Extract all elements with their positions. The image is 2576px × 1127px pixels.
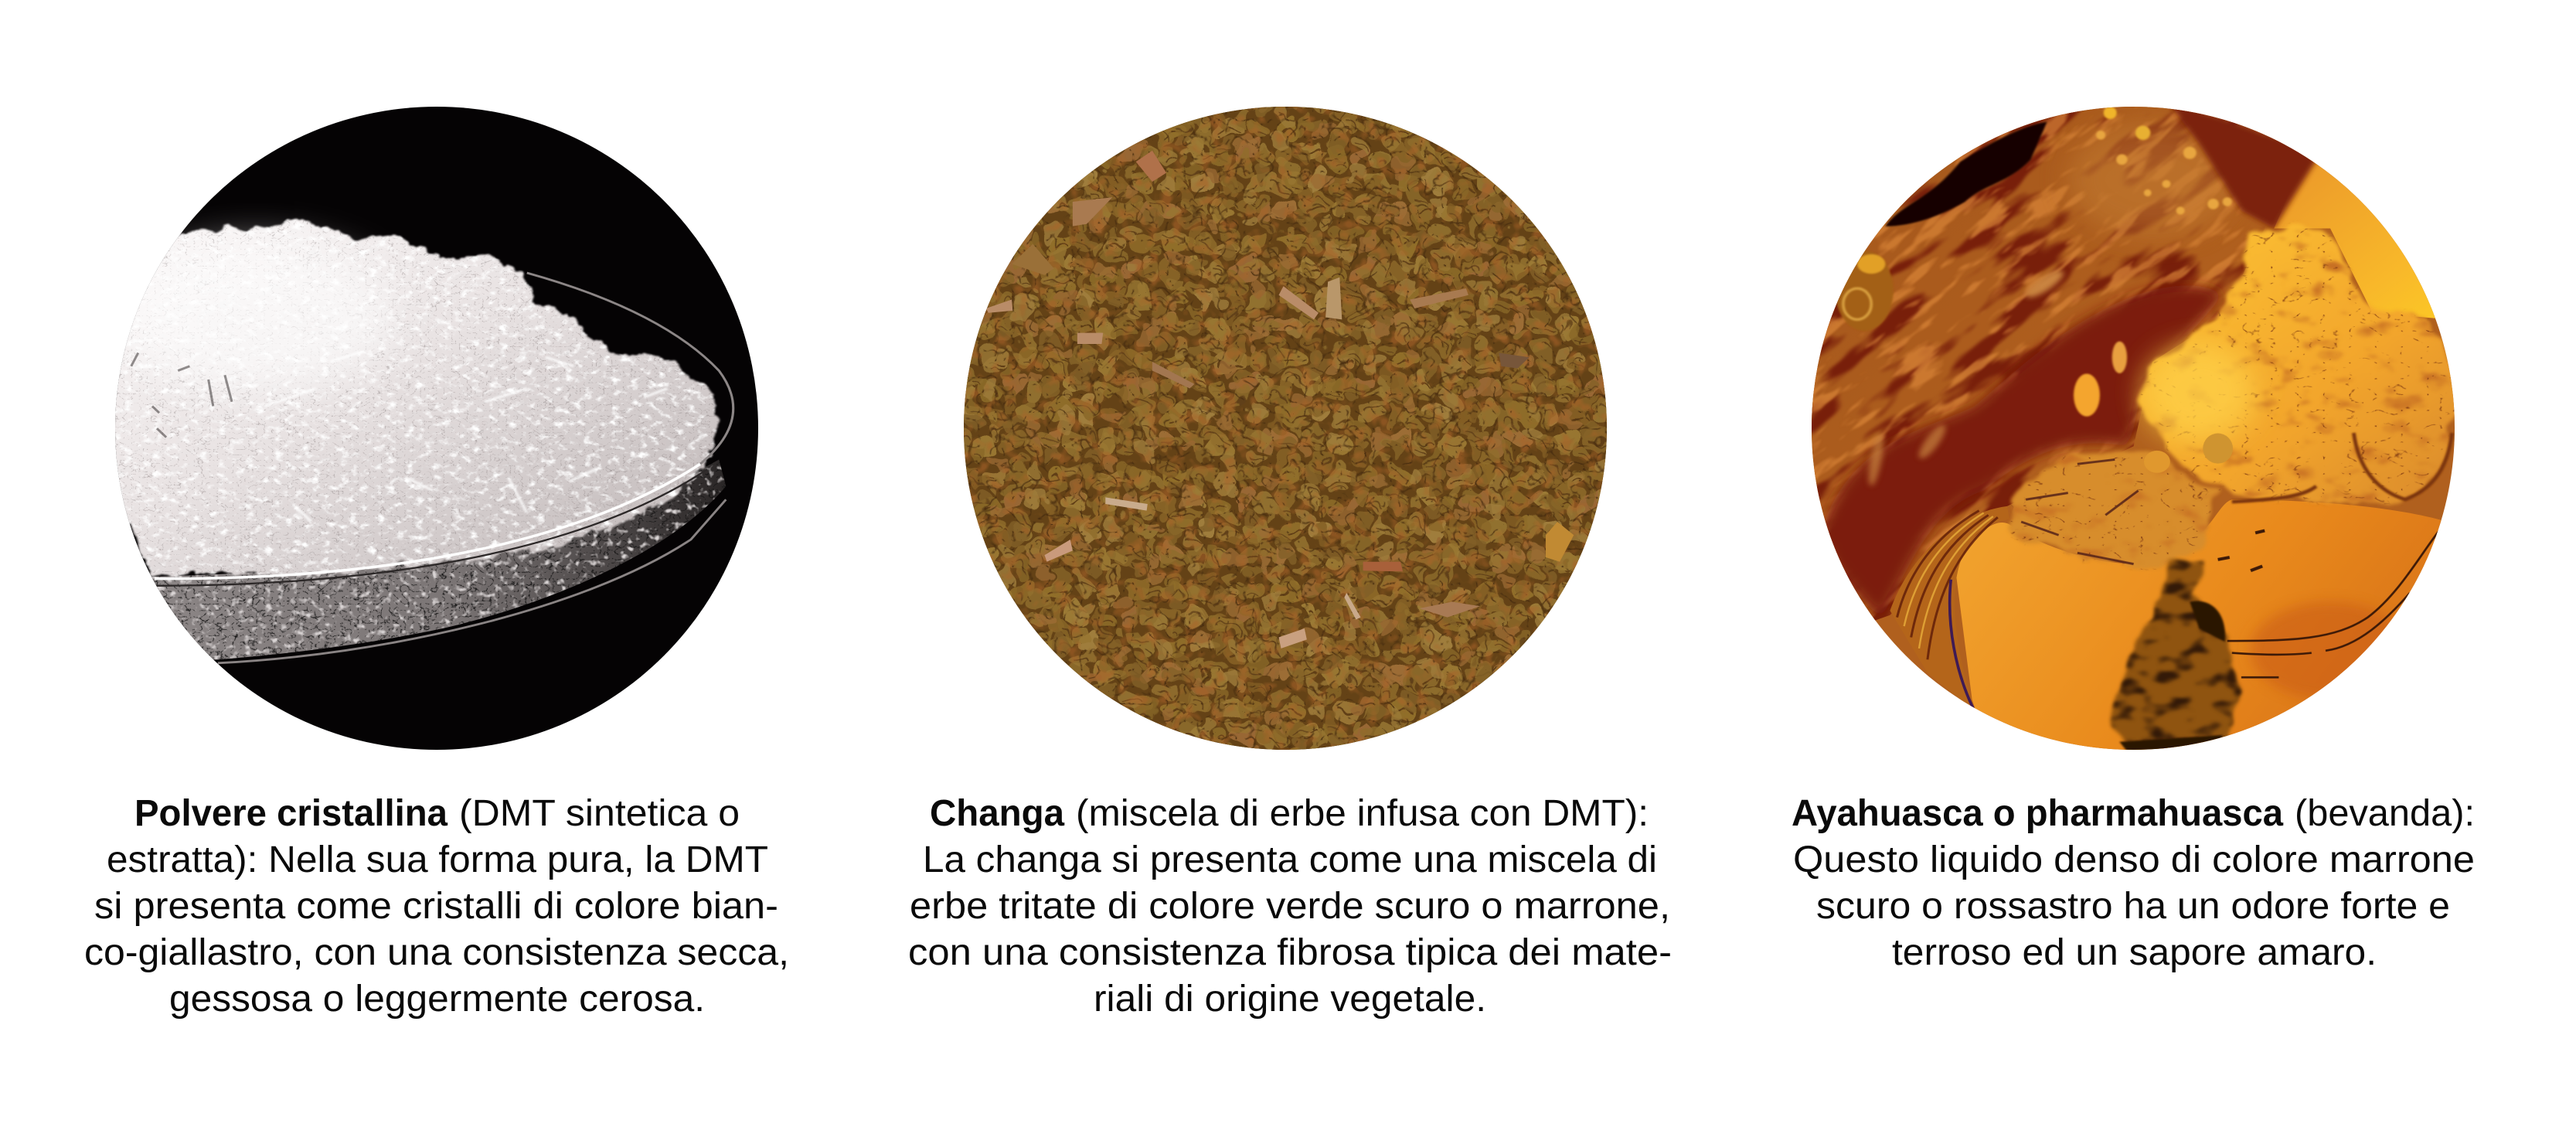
central maroon mass <box>1820 285 2223 620</box>
caption: crystalline powder: si presenta come cristalli di colore bian- <box>94 886 778 927</box>
thin liquid strands <box>2218 526 2443 677</box>
caramel top lobe <box>2068 122 2237 237</box>
droplet beads <box>2144 451 2170 473</box>
panel: changa <box>908 70 1672 1020</box>
crystal spill below the dish rim <box>105 459 726 659</box>
caption: ayahuasca: terroso ed un sapore amaro. <box>1892 932 2377 973</box>
image: amber liquid splash <box>1812 107 2455 750</box>
caption: changa: La changa si presenta come una miscela di <box>923 839 1657 880</box>
caption: ayahuasca: scuro o rossastro ha un odore forte e <box>1816 886 2450 927</box>
caption: changa: riali di origine vegetale. <box>1094 979 1486 1020</box>
right splash <box>2134 229 2455 501</box>
soft glow blobs <box>2074 374 2100 417</box>
crystal pile <box>100 217 719 575</box>
caption: ayahuasca: Ayahuasca o pharmahuasca <box>1792 793 2283 834</box>
caption: changa: con una consistenza fibrosa tipica dei mate- <box>908 932 1672 973</box>
caption: ayahuasca <box>1792 793 2475 973</box>
caption: crystalline powder: (DMT sintetica o <box>459 793 740 834</box>
caption: ayahuasca: (bevanda): <box>2295 793 2475 834</box>
caramel highlights on the maroon <box>1866 266 2067 487</box>
caption: changa: erbe tritate di colore verde scuro o marrone, <box>910 886 1670 927</box>
stem dark core <box>2190 601 2225 642</box>
reddish pool shadow <box>2251 601 2410 700</box>
caption: changa <box>908 793 1672 1020</box>
swirl curtain <box>1890 506 2009 713</box>
black shadow <box>1885 122 2047 226</box>
liquid tongue <box>2007 452 2216 566</box>
petri dish lower edge <box>218 499 726 663</box>
caption: crystalline powder <box>84 793 789 1020</box>
yellow backdrop <box>2274 156 2435 318</box>
image: chopped olive-brown herbs <box>964 107 1607 750</box>
petri dish front rim <box>155 464 700 579</box>
caption: changa: (miscela di erbe infusa con DMT): <box>1076 793 1649 834</box>
falling stem <box>2108 562 2239 753</box>
image: white crystals in a petri dish on black <box>100 107 758 750</box>
caption: crystalline powder: co-giallastro, con una consistenza secca, <box>84 932 789 973</box>
gold speckles near the top <box>2096 107 2232 215</box>
caption: crystalline powder: gessosa o leggermente cerosa. <box>169 979 705 1020</box>
caption: ayahuasca: Questo liquido denso di colore marrone <box>1793 839 2475 880</box>
yellow rays <box>2143 344 2255 442</box>
upper-left rippled liquid <box>1422 0 2576 993</box>
droplet <box>1836 250 1894 331</box>
woody pink flecks <box>986 151 1574 649</box>
soft highlight on pile <box>114 242 396 393</box>
bottom orange pool <box>1955 499 2550 811</box>
splash rim <box>2232 433 2452 502</box>
petri dish upper rim <box>527 273 733 464</box>
caption: changa: Changa <box>930 793 1064 834</box>
panel: crystalline powder <box>84 107 789 1020</box>
caption: crystalline powder: estratta): Nella sua forma pura, la DMT <box>107 839 768 880</box>
panel: ayahuasca <box>1792 107 2473 972</box>
crystal shards <box>264 352 668 522</box>
upper maroon wedge <box>2166 100 2321 229</box>
caption: crystalline powder: Polvere cristallina <box>134 793 447 834</box>
